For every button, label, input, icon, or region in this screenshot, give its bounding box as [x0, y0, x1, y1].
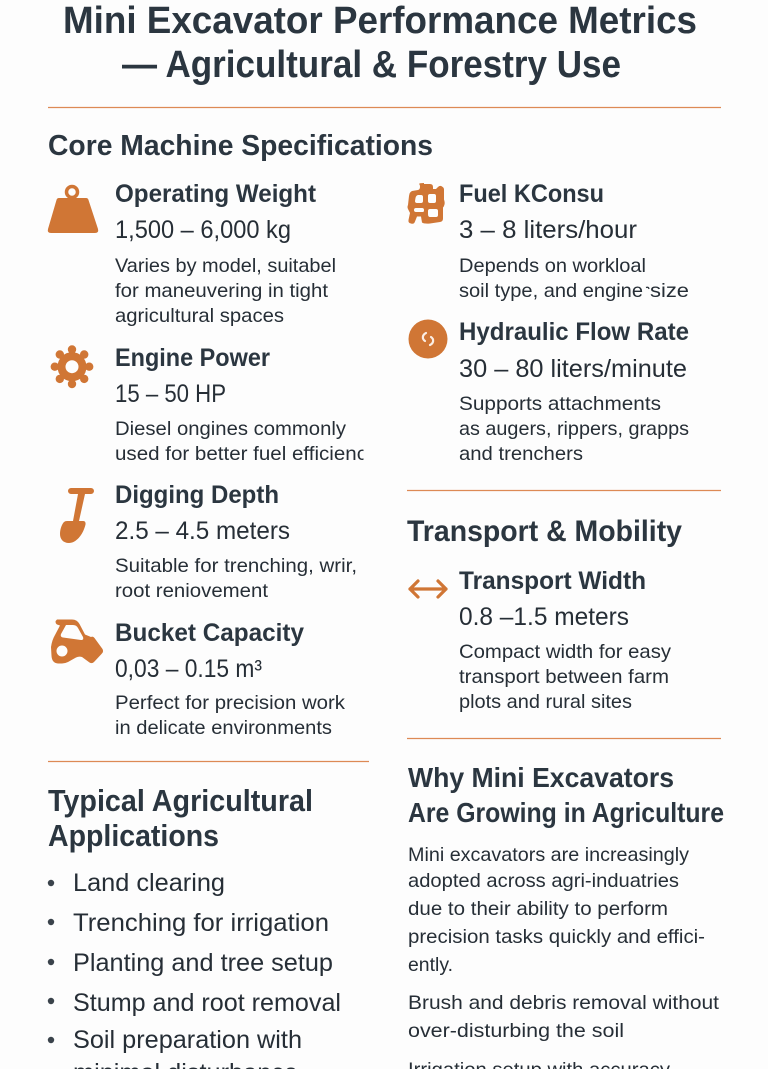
spec: transport width: 0.8 –1.5 meters: [459, 603, 629, 631]
spec: transport width: Transport Width: [459, 567, 646, 595]
spec: operating weight: 1,500 – 6,000 kg: [115, 216, 291, 244]
spec: bucket capacity: in delicate environments: [115, 717, 332, 739]
spec: hydraulic flow rate: as augers, rippers, grapps: [459, 418, 689, 440]
icon: gear: [51, 345, 93, 388]
spec: bucket capacity: [51, 619, 345, 739]
spec: fuel consumption: soil type, and engine: [459, 280, 643, 302]
icon: double arrow: [410, 581, 446, 597]
spec: operating weight: Operating Weight: [115, 180, 317, 208]
spec: transport width: Compact width for easy: [459, 641, 671, 663]
application list: Land clearing: [73, 869, 225, 897]
spec: engine power: used for better fuel efficienc: [115, 443, 367, 465]
spec: digging depth: Digging Depth: [115, 481, 279, 509]
icon: compact loader: [51, 620, 103, 664]
heading: why mini excavators: Are Growing in Agriculture: [408, 797, 724, 828]
spec: digging depth: 2.5 – 4.5 meters: [115, 517, 290, 545]
title: Mini Excavator Performance Metrics: [63, 0, 697, 42]
panel: why mini excavators are growing: [408, 762, 724, 1069]
body text: Brush and debris removal without: [408, 992, 720, 1014]
spec: digging depth: Suitable for trenching, wrir,: [115, 555, 357, 577]
spec: operating weight: Varies by model, suitabel: [115, 255, 336, 277]
application list: Stump and root removal: [73, 989, 341, 1017]
spec: hydraulic flow rate: Supports attachments: [459, 393, 661, 415]
spec: fuel consumption: Fuel KConsu: [459, 180, 604, 208]
heading: typical agricultural applications: [48, 783, 313, 853]
spec: engine power: [51, 344, 371, 466]
spec: fuel consumption: size: [650, 280, 689, 302]
spec: bucket capacity: Perfect for precision work: [115, 692, 345, 714]
spec: hydraulic flow rate: [408, 318, 689, 465]
application list: Soil preparation with: [73, 1026, 302, 1054]
spec: fuel consumption: Depends on workloal: [459, 255, 646, 277]
icon: fuel pump blob: [408, 183, 445, 224]
spec: hydraulic flow rate: 30 – 80 liters/minute: [459, 355, 687, 383]
application list: Planting and tree setup: [73, 949, 333, 977]
spec: hydraulic flow rate: Hydraulic Flow Rate: [459, 318, 689, 346]
spec: engine power: 15 – 50 HP: [115, 380, 226, 408]
heading: core machine specifications: Core Machine Specifications: [48, 130, 433, 162]
body text: due to their ability to perform: [408, 898, 668, 920]
spec: engine power: Engine Power: [115, 344, 270, 372]
body text: [408, 844, 720, 1069]
spec: hydraulic flow rate: and trenchers: [459, 443, 583, 465]
spec: transport width: [410, 567, 671, 713]
icon: hydraulic swirl: [408, 320, 448, 358]
spec: operating weight: agricultural spaces: [115, 305, 284, 327]
heading: why mini excavators: Why Mini Excavators: [408, 762, 674, 793]
heading: transport and mobility: Transport & Mobility: [407, 515, 682, 548]
spec: bucket capacity: Bucket Capacity: [115, 619, 304, 647]
spec: digging depth: [60, 481, 357, 602]
spec: fuel consumption: 3 – 8 liters/hour: [459, 216, 637, 244]
spec: operating weight: for maneuvering in tight: [115, 280, 329, 302]
spec: bucket capacity: 0,03 – 0.15 m³: [115, 655, 262, 683]
panel: typical agricultural applications: [48, 783, 341, 1069]
body text: over-disturbing the soil: [408, 1020, 624, 1042]
body text: Mini excavators are increasingly: [408, 844, 689, 866]
spec: digging depth: root reniovement: [115, 580, 269, 602]
heading: typical agricultural applications: Typical Agricultural: [48, 783, 313, 818]
spec: engine power: Diesel ongines commonly: [115, 418, 346, 440]
spec: operating weight: [48, 180, 336, 327]
spec: fuel consumption: [408, 180, 689, 302]
title: [63, 0, 697, 86]
spec: transport width: transport between farm: [459, 666, 669, 688]
body text: adopted across agri-induatries: [408, 870, 679, 892]
heading: why mini excavators: [408, 762, 724, 828]
application list: Trenching for irrigation: [73, 909, 329, 937]
body text: precision tasks quickly and effici-: [408, 926, 705, 948]
body text: ently.: [408, 954, 453, 976]
heading: typical agricultural applications: Applications: [48, 818, 219, 853]
application list: [48, 869, 341, 1069]
icon: weight: [48, 186, 98, 233]
icon: shovel: [60, 488, 94, 543]
spec: transport width: plots and rural sites: [459, 691, 632, 713]
title: — Agricultural & Forestry Use: [122, 44, 621, 86]
